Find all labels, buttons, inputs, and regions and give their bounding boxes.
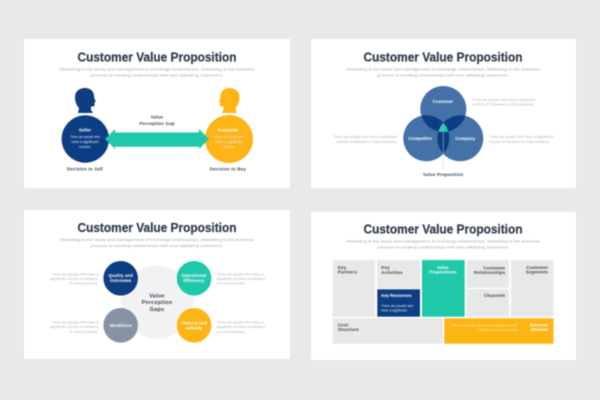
cell: value propositions xyxy=(422,260,465,317)
central circle: Perception xyxy=(142,300,172,306)
circle: finance and subsidy xyxy=(176,308,212,343)
cell: key resources: There are people who xyxy=(381,304,414,308)
circle: workforce: Workforce xyxy=(110,323,132,328)
panel: seller and customer perception gap xyxy=(24,39,290,188)
note: bottom right xyxy=(217,320,265,334)
cell: cost structure xyxy=(333,318,443,344)
cell: channels xyxy=(467,289,509,317)
note: company xyxy=(489,135,553,144)
panel: venn diagram xyxy=(311,39,576,188)
cell: channels: Channels xyxy=(484,293,506,298)
note: bottom left: in every business. xyxy=(70,330,98,334)
note: competitor: number of followers in every business. xyxy=(336,140,397,144)
circle: quality and outcomes: Quality and xyxy=(108,273,133,278)
cell: cost structure: Cost xyxy=(338,322,349,328)
cell: customer segments xyxy=(511,260,553,317)
cell: key partners: Partners xyxy=(338,270,357,274)
cell: key activities: Key xyxy=(381,265,390,270)
central circle: Gaps xyxy=(150,307,164,313)
cell: revenue streams: Streams xyxy=(531,327,549,332)
heading: Customer Value Proposition xyxy=(364,50,522,64)
cell: value propositions: Propositions xyxy=(429,270,457,274)
subtitle: Marketing is the study and management of exchange relationships. Marketing is the business xyxy=(60,237,254,242)
note: customer xyxy=(472,98,535,107)
note: bottom left: There are people who have a xyxy=(52,320,98,324)
central circle: Value xyxy=(149,294,165,300)
customer circle xyxy=(205,115,253,163)
note: customer: number of followers in every business. xyxy=(472,103,534,107)
heading: Customer Value Proposition xyxy=(78,50,236,64)
note: bottom left: significant number of followers xyxy=(50,325,98,329)
label: decision to buy: Decision to Buy xyxy=(210,166,246,172)
subtitle xyxy=(347,66,540,77)
cell: key resources: Key Resources xyxy=(381,293,412,298)
note: top left: There are people who have a xyxy=(52,272,98,276)
note: bottom left xyxy=(50,320,98,334)
arrow: double-headed gap xyxy=(105,129,209,149)
subtitle: Marketing is the study and management of exchange relationships. Marketing is the business xyxy=(60,66,255,71)
cell: key resources: have a significant. xyxy=(381,308,408,312)
note: bottom right: There are people who have a xyxy=(217,320,263,324)
note: top left: in every business. xyxy=(70,282,98,286)
cell: key activities xyxy=(377,260,420,288)
label: value proposition: Value Proposition xyxy=(423,172,464,177)
circle: finance and subsidy: subsidy xyxy=(186,326,203,330)
cell: customer relationships: Customer xyxy=(483,266,505,270)
icon: customer head xyxy=(218,88,240,113)
cell: key activities: Activities xyxy=(381,270,403,275)
cell: cost structure: Structure xyxy=(338,327,359,332)
customer circle: There are people who xyxy=(214,135,244,139)
infographic slides xyxy=(24,39,576,360)
note: bottom right: in every business. xyxy=(217,330,245,334)
circle: finance and subsidy: Finance and xyxy=(181,320,207,326)
note: company: number of followers in every business. xyxy=(489,140,550,144)
cell: customer segments: Customer xyxy=(526,265,548,270)
subtitle: Marketing is the study and management of exchange relationships. Marketing is the business xyxy=(347,66,540,71)
circle: operational efficiency: Efficiency xyxy=(183,278,205,283)
note: top right xyxy=(217,272,265,286)
venn circles xyxy=(403,86,483,161)
panel: value perception gaps xyxy=(24,210,290,359)
subtitle xyxy=(60,237,254,248)
note: competitor: There are people who have a significant xyxy=(333,135,397,139)
venn centre xyxy=(438,122,449,133)
subtitle: process of creating relationships with and satisfying customers. xyxy=(90,243,224,248)
cell: key partners: Key xyxy=(338,265,347,270)
note: company: There are people who have a significant xyxy=(489,135,553,139)
note: bottom right: significant number of followers xyxy=(217,325,265,329)
cell: customer relationships xyxy=(467,260,509,288)
circle: operational efficiency xyxy=(176,261,212,296)
cell: customer segments: Segments xyxy=(526,270,549,274)
circle: quality and outcomes xyxy=(103,261,138,296)
customer circle: have a significant xyxy=(216,140,243,144)
customer circle: number. xyxy=(223,145,235,149)
connector line xyxy=(442,132,444,170)
note: top right: in every business. xyxy=(217,282,245,286)
note: top right: significant number of followers xyxy=(217,277,265,281)
cell: key partners xyxy=(333,260,375,317)
subtitle: process of creating relationships with and satisfying customers. xyxy=(377,72,509,77)
venn labels: Competitor xyxy=(408,136,432,141)
seller circle xyxy=(62,115,109,163)
heading: Customer Value Proposition xyxy=(364,222,522,236)
circle: quality and outcomes: Outcomes xyxy=(110,278,132,283)
circle: workforce xyxy=(103,308,138,343)
subtitle: process of creating relationships with and satisfying customers. xyxy=(377,244,509,249)
cell: customer relationships: Relationships xyxy=(474,270,506,275)
subtitle xyxy=(60,66,255,77)
subtitle: process of creating relationships with and satisfying customers. xyxy=(90,72,224,77)
heading: Customer Value Proposition xyxy=(78,221,236,235)
venn labels: Customer xyxy=(433,99,454,104)
icon: seller head xyxy=(75,88,96,113)
note: competitor xyxy=(333,135,397,144)
subtitle xyxy=(346,238,540,249)
venn labels xyxy=(408,99,476,141)
venn labels: Company xyxy=(455,136,476,141)
cell: revenue streams: of followers in every business. xyxy=(477,328,518,332)
note: customer: There are people who have a significant xyxy=(472,98,535,102)
cell: revenue streams xyxy=(444,318,554,344)
circle: operational efficiency: Operational xyxy=(182,273,206,278)
cell: key resources xyxy=(377,289,420,317)
seller circle: Seller xyxy=(79,128,91,132)
customer circle: Customer xyxy=(218,128,239,132)
panel: business model canvas xyxy=(311,212,576,360)
note: top left xyxy=(50,272,98,286)
cell: revenue streams: Revenue xyxy=(530,322,549,328)
cell: value propositions: Value xyxy=(437,265,449,270)
seller circle: have a significant xyxy=(72,140,99,144)
subtitle: Marketing is the study and management of exchange relationships. Marketing is the business xyxy=(346,238,540,243)
seller circle: number. xyxy=(79,145,91,149)
seller circle: There are people who xyxy=(70,135,100,139)
label: value perception gap: Perception Gap xyxy=(139,121,175,126)
label: value perception gap xyxy=(139,114,175,126)
central circle xyxy=(120,266,194,339)
label: decision to sell: Decision to Sell xyxy=(67,166,103,172)
note: top left: significant number of followers xyxy=(50,277,98,281)
label: value perception gap: Value xyxy=(151,114,164,120)
note: top right: There are people who have a xyxy=(217,272,263,276)
cell: revenue streams: There are people who have a significant number xyxy=(452,323,519,327)
